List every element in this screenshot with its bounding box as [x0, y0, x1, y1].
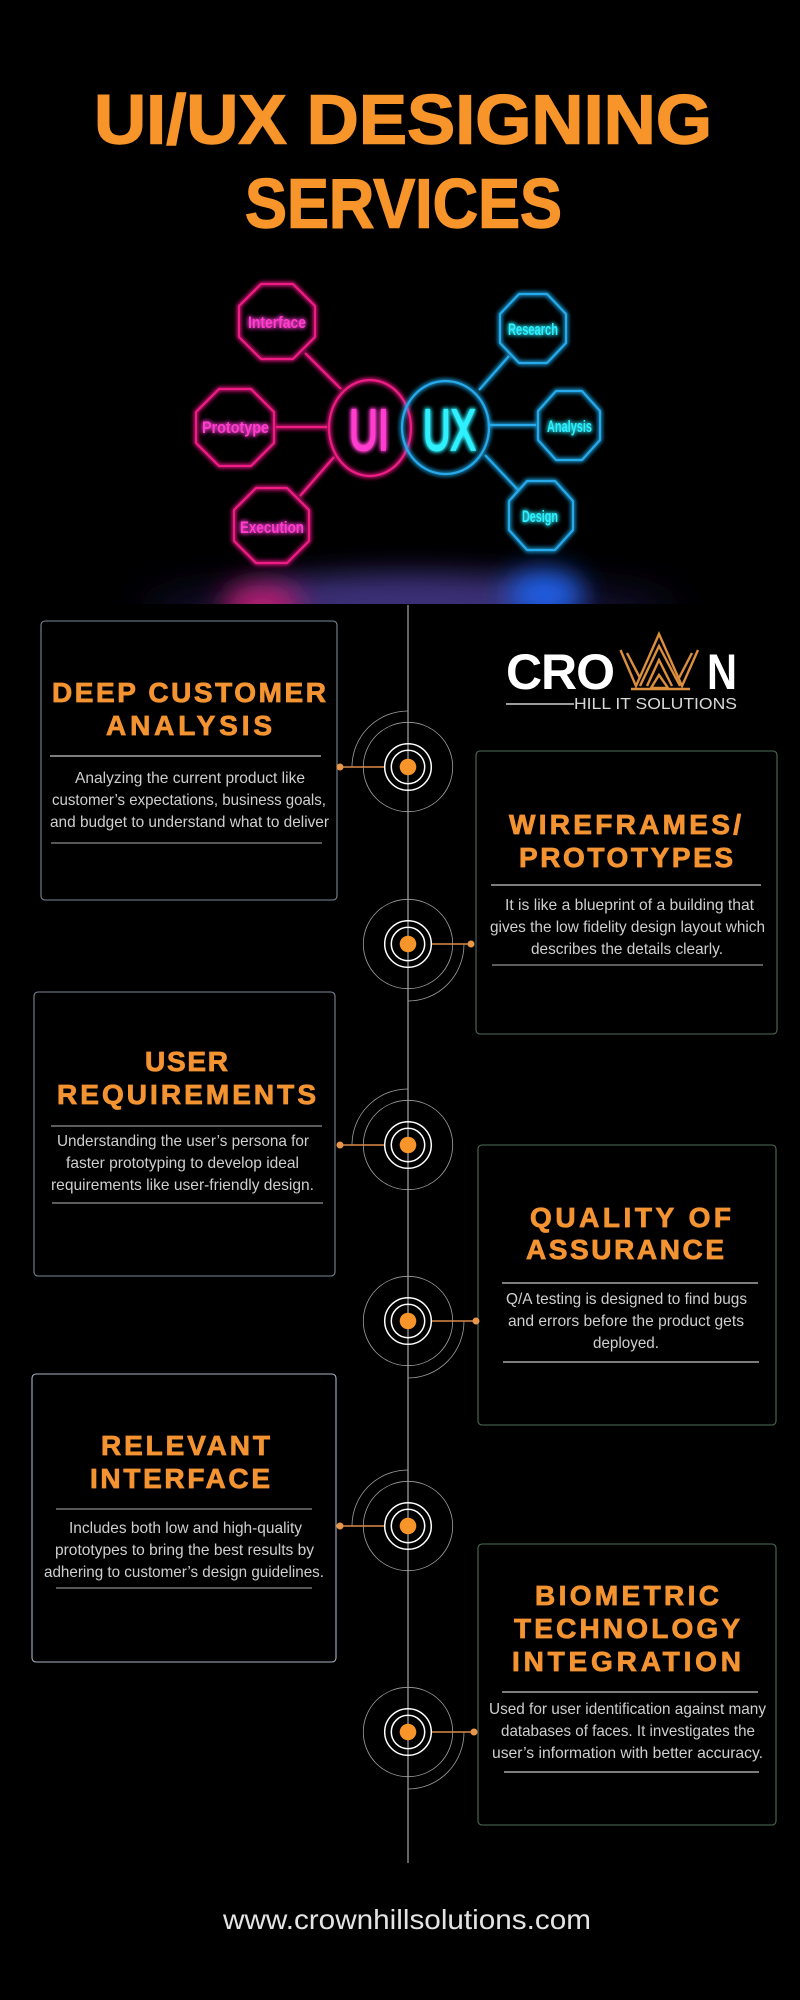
heading [512, 1580, 741, 1677]
description [44, 1520, 324, 1581]
timeline line [407, 605, 409, 1863]
heading: ASSURANCE [526, 1234, 724, 1265]
panel: relevant interface [32, 1374, 336, 1662]
UI labels [202, 313, 389, 537]
description: and errors before the product gets [508, 1313, 744, 1330]
UX mind map in blue [402, 294, 600, 550]
logo: Crown Hill IT Solutions [506, 634, 737, 713]
UI labels: UI [349, 398, 389, 463]
heading: TECHNOLOGY [514, 1613, 740, 1644]
description: prototypes to bring the best results by [55, 1542, 314, 1559]
timeline node 1 [336, 711, 453, 812]
description: Q/A testing is designed to find bugs [506, 1291, 747, 1308]
description [489, 1701, 766, 1762]
title [94, 80, 712, 242]
UX labels: Design [522, 507, 558, 526]
UI labels: Execution [240, 518, 304, 537]
heading: RELEVANT [101, 1430, 270, 1461]
timeline node 6 [363, 1687, 478, 1789]
logo wordmark: N [707, 644, 737, 700]
footer website: www.crownhillsolutions.com [222, 1904, 591, 1935]
UX labels: Analysis [547, 417, 592, 436]
heading: USER [145, 1046, 228, 1077]
hero image: UI UX neon diagram [140, 284, 680, 634]
UX labels: UX [423, 398, 476, 463]
logo wordmark [506, 644, 737, 700]
heading: QUALITY OF [530, 1202, 731, 1233]
timeline node 3 [336, 1089, 453, 1190]
UX labels [423, 320, 592, 526]
description: user’s information with better accuracy. [492, 1745, 763, 1762]
description [506, 1291, 747, 1352]
logo wordmark: CRO [506, 644, 615, 700]
title: SERVICES [245, 164, 562, 242]
heading: INTERFACE [90, 1463, 270, 1494]
description: faster prototyping to develop ideal [66, 1155, 299, 1172]
UX labels: Research [508, 320, 558, 339]
description: and budget to understand what to deliver [50, 814, 330, 831]
UI labels: Interface [248, 313, 306, 332]
logo tagline: HILL IT SOLUTIONS [574, 696, 737, 713]
panel: user requirements [34, 992, 335, 1276]
heading: REQUIREMENTS [57, 1079, 316, 1110]
heading [526, 1202, 731, 1265]
heading: PROTOTYPES [519, 842, 733, 873]
floor reflection [142, 550, 678, 604]
description: databases of faces. It investigates the [501, 1723, 755, 1740]
panel: wireframes prototypes [476, 751, 777, 1034]
description: Used for user identification against many [489, 1701, 766, 1718]
description: customer’s expectations, business goals, [52, 792, 326, 809]
timeline node 5 [336, 1470, 453, 1571]
description: requirements like user-friendly design. [51, 1177, 314, 1194]
description [51, 1133, 314, 1194]
heading: ANALYSIS [106, 710, 272, 741]
panel: deep customer analysis [41, 621, 337, 900]
UI labels: Prototype [202, 418, 269, 437]
description: Includes both low and high-quality [69, 1520, 302, 1537]
description: Analyzing the current product like [75, 770, 305, 787]
description: gives the low fidelity design layout which [490, 919, 765, 936]
heading: WIREFRAMES/ [509, 809, 741, 840]
timeline node 4 [363, 1276, 480, 1378]
panel: quality of assurance [478, 1145, 776, 1425]
panel: biometric technology integration [478, 1544, 776, 1825]
heading: DEEP CUSTOMER [52, 677, 326, 708]
heading: BIOMETRIC [535, 1580, 719, 1611]
heading [509, 809, 741, 873]
timeline node 2 [363, 899, 474, 1001]
description: adhering to customer’s design guidelines. [44, 1564, 324, 1581]
description: Understanding the user’s persona for [57, 1133, 310, 1150]
UI mind map in pink [196, 284, 411, 563]
description: describes the details clearly. [531, 941, 723, 958]
description [50, 770, 330, 831]
description [490, 897, 765, 958]
description: deployed. [593, 1335, 659, 1352]
description: It is like a blueprint of a building that [505, 897, 755, 914]
heading [52, 677, 326, 741]
heading [90, 1430, 270, 1494]
heading: INTEGRATION [512, 1646, 741, 1677]
title: UI/UX DESIGNING [94, 80, 712, 158]
heading [57, 1046, 316, 1110]
logo crown icon [620, 634, 698, 689]
